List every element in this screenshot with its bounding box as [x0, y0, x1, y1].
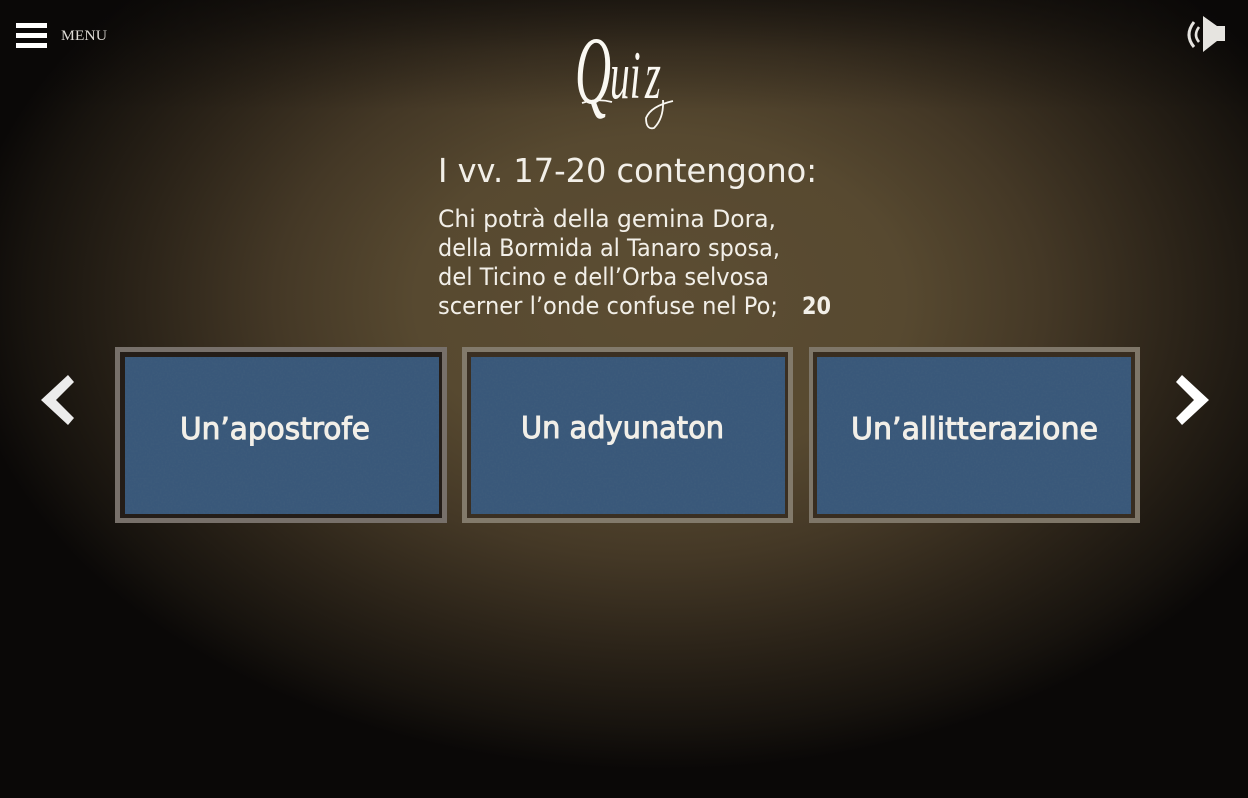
- icon: speaker: [1189, 16, 1225, 52]
- panel: answer 2: Un adyunaton: [521, 411, 724, 446]
- heading: question: I vv. 17-20 contengono:: [438, 151, 817, 190]
- menu label: MENU: [61, 28, 107, 44]
- title: Quiz: z: [644, 39, 661, 114]
- panel: answer 3: [809, 347, 1140, 523]
- panel: answer 1: Un’apostrofe: [180, 412, 370, 447]
- icon: right arrow: [1176, 375, 1209, 425]
- title: Quiz: Q: [575, 18, 611, 124]
- icon: left arrow: [41, 375, 74, 425]
- text block: verses: 20: [802, 292, 831, 320]
- title: Quiz: [575, 18, 673, 128]
- title: Quiz: ui: [610, 38, 641, 114]
- icon: menu hamburger: [16, 23, 47, 48]
- text block: verses: Chi potrà della gemina Dora,: [438, 205, 776, 233]
- panel: answer 1: [115, 347, 447, 523]
- text block: verses: della Bormida al Tanaro sposa,: [438, 234, 780, 262]
- text block: verses: [438, 205, 831, 320]
- text block: verses: del Ticino e dell’Orba selvosa: [438, 263, 769, 291]
- panel: answer 2: [462, 347, 793, 523]
- text block: verses: scerner l’onde confuse nel Po;: [438, 292, 778, 320]
- panel: answer 3: Un’allitterazione: [851, 412, 1098, 447]
